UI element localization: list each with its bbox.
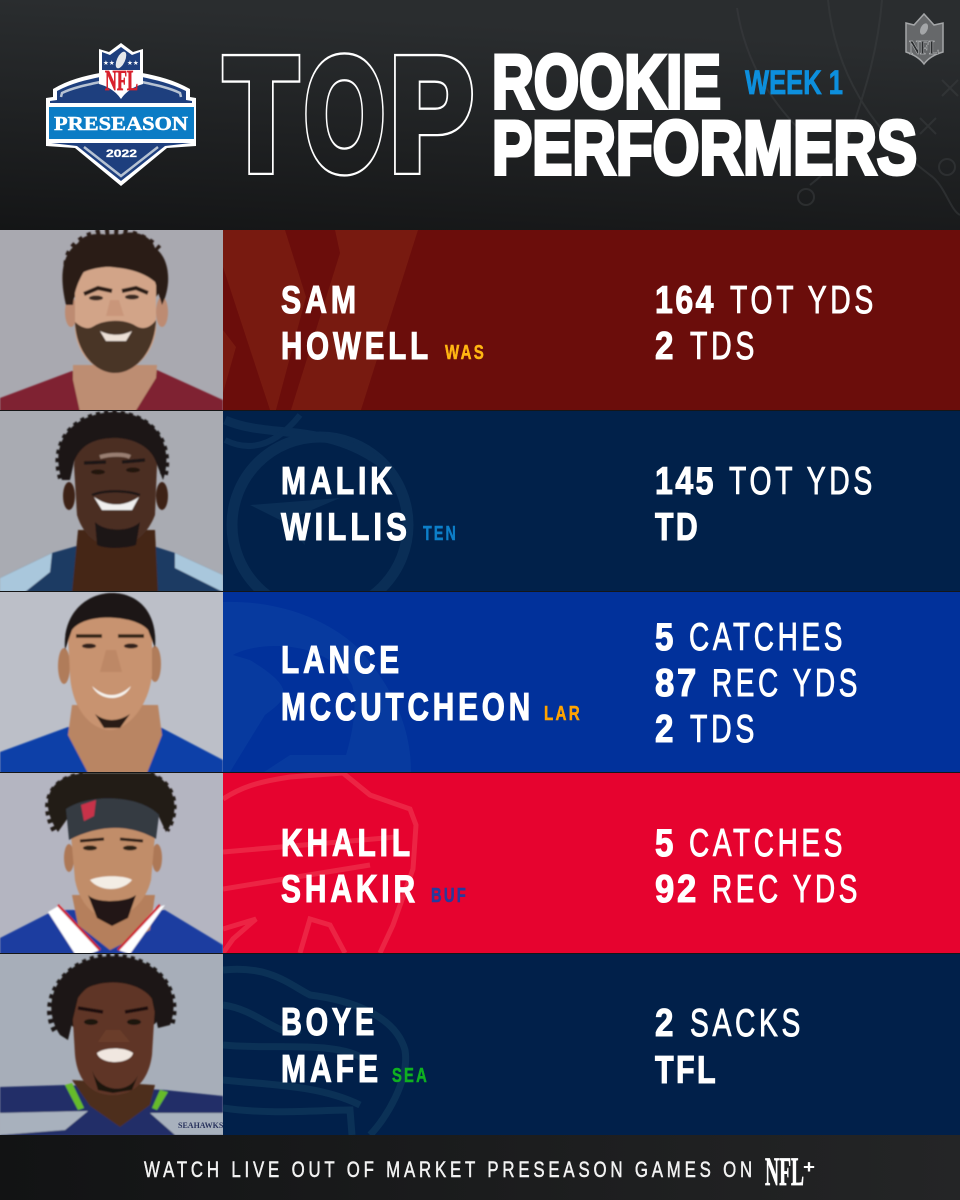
title: TOP outlined: P	[390, 24, 473, 204]
stats	[655, 1002, 804, 1092]
stats: 92	[655, 868, 699, 911]
panel: Tennessee	[223, 411, 960, 591]
row 5: Boye Mafe	[0, 954, 960, 1136]
play diagram background	[737, 0, 960, 215]
week label: WEEK 1	[745, 64, 843, 102]
stats: TDS	[690, 708, 758, 751]
photo: Boye Mafe	[0, 954, 224, 1136]
stats	[655, 279, 877, 368]
NFL shield	[99, 43, 143, 99]
stats	[655, 616, 861, 751]
icon: NFL+ wordmark: +	[803, 1157, 815, 1177]
NFL shield: ★★	[127, 59, 139, 67]
footer text: WATCH LIVE OUT OF MARKET PRESEASON GAMES ON	[144, 1157, 756, 1182]
stats: CATCHES	[689, 616, 846, 659]
panel: Los Angeles	[223, 592, 960, 772]
panel: Washington	[223, 230, 960, 410]
stats: TOT YDS	[729, 460, 876, 503]
row 2: Malik Willis: WILLIS	[281, 506, 411, 549]
stats: 5	[655, 616, 676, 659]
stats: 2	[655, 708, 676, 751]
stats: 164	[655, 279, 716, 322]
row 4: Khalil Shakir	[0, 773, 960, 954]
name: MALIK	[281, 460, 396, 503]
name: KHALIL	[281, 822, 414, 865]
title: TOP outlined	[224, 24, 473, 204]
photo: Sam Howell	[0, 230, 223, 412]
row 5: Boye Mafe: MAFE	[281, 1048, 382, 1091]
row 3: Lance McCutcheon	[0, 592, 960, 773]
title: TOP outlined: O	[304, 24, 384, 204]
stats: REC YDS	[712, 868, 861, 911]
row 1: Sam Howell: HOWELL	[281, 325, 432, 368]
name: LANCE	[281, 639, 403, 682]
title: ROOKIE: ROOKIE	[492, 40, 721, 125]
panel: Seattle	[223, 954, 960, 1135]
title: TOP outlined: T	[224, 24, 298, 204]
jersey wordmark: SEAHAWKS	[178, 1121, 224, 1130]
stats	[655, 822, 861, 911]
stats: 145	[655, 460, 716, 503]
title: TOP outlined: P	[390, 24, 473, 204]
stats: REC YDS	[712, 662, 861, 705]
icon: NFL+ wordmark	[765, 1149, 815, 1194]
stats: 2	[655, 1002, 676, 1045]
logo: NFL Preseason 2022 badge	[46, 43, 196, 186]
year label: 2022	[106, 148, 137, 160]
name: BOYE	[281, 1001, 378, 1044]
footer bar	[0, 1135, 960, 1200]
icon: NFL shield grey: NFL	[909, 37, 939, 59]
stats: 5	[655, 822, 676, 865]
photo: Lance McCutcheon	[0, 592, 223, 773]
stats: CATCHES	[689, 822, 846, 865]
stats: TDS	[690, 325, 758, 368]
row 1: Sam Howell	[0, 230, 960, 412]
header panel	[0, 0, 960, 230]
title: TOP outlined: O	[304, 24, 384, 204]
stats: TOT YDS	[730, 279, 877, 322]
panel: Buffalo	[223, 773, 960, 953]
photo: Malik Willis	[0, 411, 223, 592]
stats	[655, 460, 876, 549]
title: TOP outlined: T	[224, 24, 298, 204]
row 4: Khalil Shakir: SHAKIR	[281, 868, 419, 911]
icon: NFL shield grey	[906, 14, 943, 64]
stats: 87	[655, 662, 699, 705]
stats: TFL	[655, 1049, 718, 1092]
stats: 2	[655, 325, 676, 368]
row 3: Lance McCutcheon: MCCUTCHEON	[281, 686, 534, 729]
stats: SACKS	[690, 1002, 804, 1045]
preseason label: PRESEASON	[54, 113, 189, 135]
team tag: WAS	[445, 342, 486, 364]
team tag: SEA	[392, 1065, 429, 1087]
NFL shield: ★★	[103, 59, 115, 67]
stats: TD	[655, 506, 700, 549]
icon: NFL+ wordmark: NFL	[765, 1149, 804, 1194]
NFL shield: NFL	[105, 66, 138, 97]
photo: Khalil Shakir	[0, 773, 223, 954]
team tag: BUF	[431, 885, 468, 907]
row 2: Malik Willis	[0, 411, 960, 591]
team tag: LAR	[544, 703, 582, 725]
name: SAM	[281, 279, 360, 322]
team tag: TEN	[423, 523, 458, 545]
